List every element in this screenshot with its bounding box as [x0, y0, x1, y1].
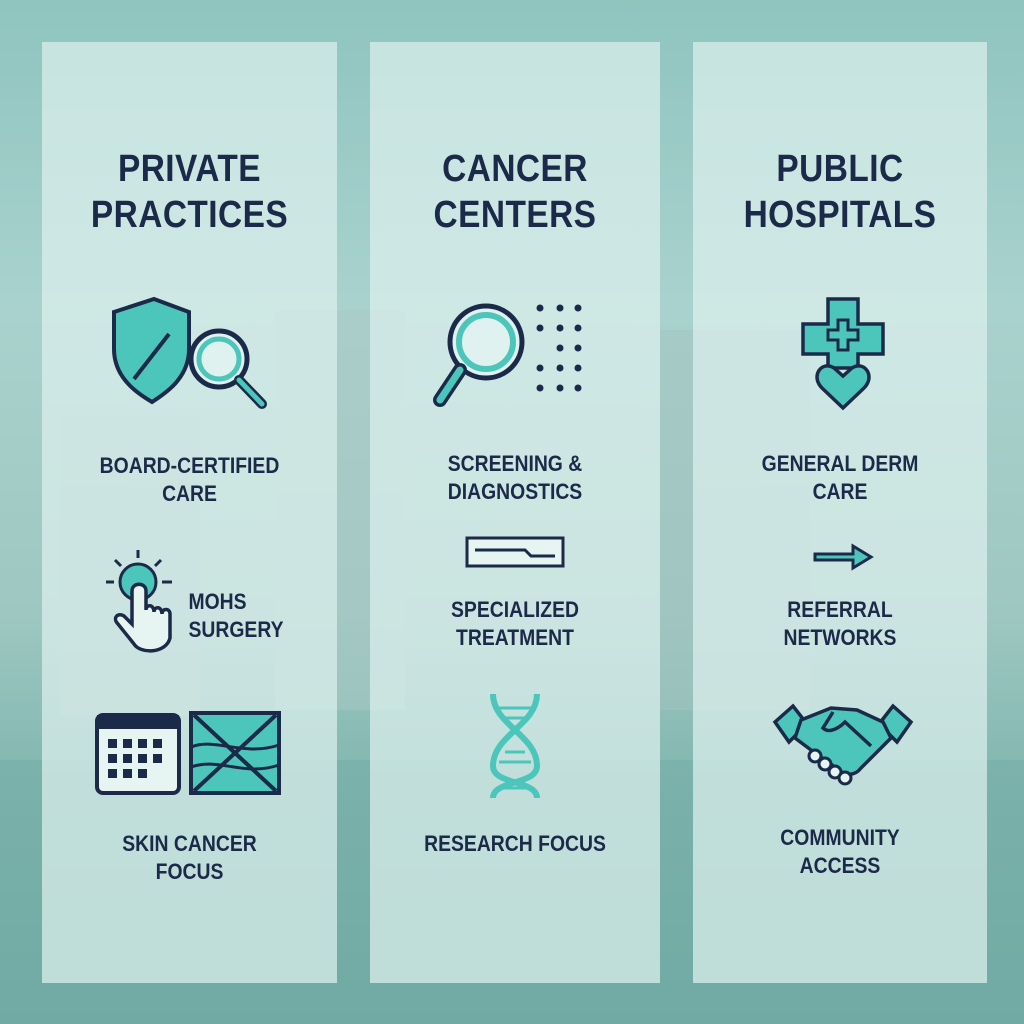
- icon: calendar and skin: [95, 711, 281, 795]
- label: specialized treatment: TREATMENT: [456, 625, 574, 650]
- label: skin cancer focus: SKIN CANCER: [122, 831, 257, 856]
- heading: HOSPITALS: [744, 194, 936, 236]
- label: mohs surgery: [188, 589, 284, 642]
- label: board-certified care: [100, 453, 279, 506]
- heading: PUBLIC: [776, 148, 904, 190]
- icon: arrow: [814, 543, 874, 571]
- heading: CENTERS: [434, 194, 596, 236]
- label: board-certified care: BOARD-CERTIFIED: [100, 453, 279, 478]
- heading: PRACTICES: [91, 194, 288, 236]
- icon: handshake: [772, 704, 914, 786]
- label: general derm care: [762, 451, 918, 504]
- label: referral networks: NETWORKS: [784, 625, 896, 650]
- icon: treatment bar: [466, 536, 564, 568]
- heading: [91, 148, 288, 236]
- icon: magnifier with dots: [433, 304, 582, 407]
- label: board-certified care: CARE: [162, 481, 217, 506]
- label: general derm care: CARE: [813, 479, 867, 504]
- label: mohs surgery: MOHS: [188, 589, 247, 614]
- icon: hand tap: [106, 550, 172, 653]
- label: specialized treatment: [451, 597, 579, 650]
- label: skin cancer focus: FOCUS: [156, 859, 223, 884]
- label: screening & diagnostics: [448, 451, 582, 504]
- label: mohs surgery: SURGERY: [188, 617, 284, 642]
- label: community access: ACCESS: [800, 853, 880, 878]
- panel: private practices: [42, 42, 337, 983]
- panel: public hospitals: [693, 42, 987, 983]
- label: community access: [780, 825, 900, 878]
- icon: cross and heart: [801, 297, 885, 410]
- label: screening & diagnostics: DIAGNOSTICS: [448, 479, 582, 504]
- label: community access: COMMUNITY: [780, 825, 900, 850]
- icon: dna: [490, 694, 540, 798]
- heading: PRIVATE: [118, 148, 261, 190]
- heading: [744, 148, 936, 236]
- heading: CANCER: [442, 148, 588, 190]
- label: skin cancer focus: [122, 831, 257, 884]
- heading: [434, 148, 596, 236]
- label: specialized treatment: SPECIALIZED: [451, 597, 579, 622]
- label: research focus: RESEARCH FOCUS: [424, 831, 606, 856]
- label: referral networks: REFERRAL: [787, 597, 893, 622]
- label: referral networks: [784, 597, 896, 650]
- panel: cancer centers: [370, 42, 660, 983]
- icon: shield with magnifier: [112, 296, 267, 409]
- label: screening & diagnostics: SCREENING &: [448, 451, 582, 476]
- label: general derm care: GENERAL DERM: [762, 451, 918, 476]
